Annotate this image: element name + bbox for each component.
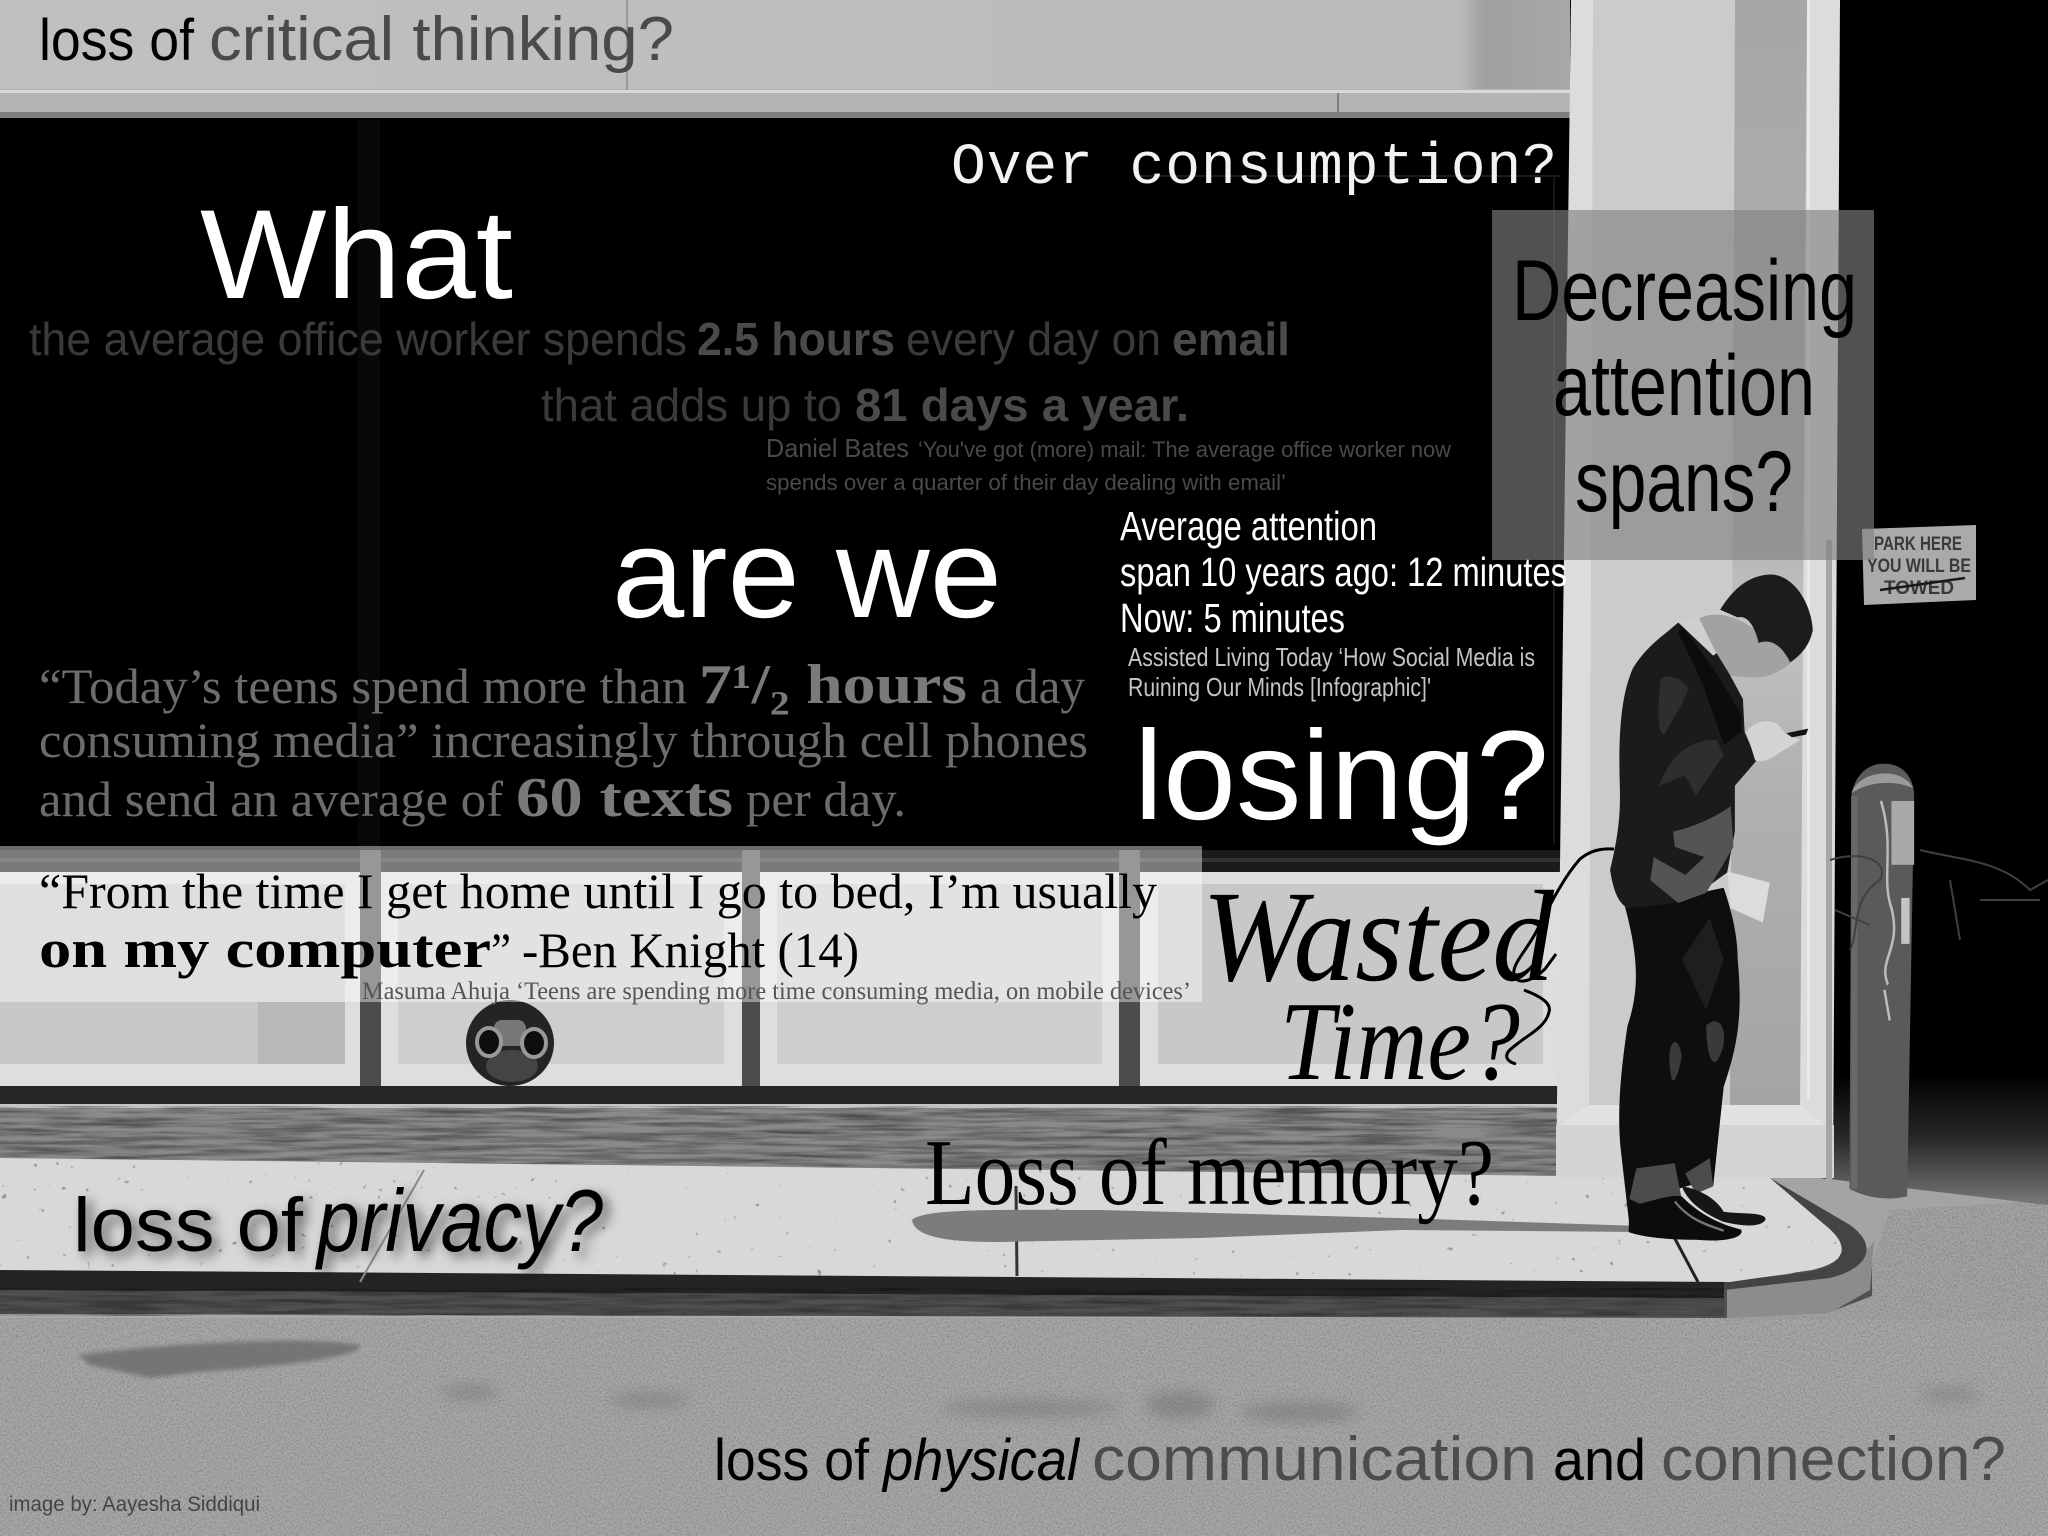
teen media statistic: and send an average of bbox=[39, 771, 503, 827]
road shadow blotches bbox=[78, 1341, 1980, 1422]
translucent quote panel: -Ben Knight (14) bbox=[522, 922, 859, 978]
heading: loss of physical communication and connection: connection? bbox=[1661, 1425, 2006, 1494]
title word: What: What bbox=[200, 183, 513, 325]
jacket bbox=[1610, 622, 1757, 908]
translucent quote panel: “From the time I get home until I go to bed, I’m usually bbox=[39, 863, 1157, 919]
teen media statistic bbox=[39, 654, 1088, 829]
email source: Daniel Bates bbox=[766, 433, 909, 463]
hair bbox=[1720, 574, 1813, 662]
translucent quote panel: ” bbox=[491, 922, 511, 978]
bollard post bbox=[1850, 764, 1914, 1198]
teen media statistic: 7¹/₂ hours bbox=[699, 654, 967, 716]
paper in hand bbox=[1727, 871, 1770, 922]
right dark ground bbox=[1830, 1075, 2048, 1220]
heading: loss of memory: Loss of memory? bbox=[925, 1121, 1494, 1225]
decreasing attention spans panel bbox=[1492, 210, 1874, 560]
heading: loss of physical communication and connection: loss of bbox=[714, 1428, 870, 1493]
attention span statistic: Average attention bbox=[1120, 503, 1377, 549]
email statistic bbox=[29, 313, 1290, 431]
attention span statistic: span 10 years ago: 12 minutes bbox=[1120, 549, 1567, 595]
man looking at phone bbox=[1610, 574, 1813, 1240]
upper wall bbox=[0, 0, 1570, 90]
heading: loss of privacy: loss of bbox=[73, 1183, 304, 1268]
ledge bbox=[0, 0, 1570, 118]
email source: spends over a quarter of their day dealing with email’ bbox=[766, 470, 1286, 495]
sign: park here: PARK HERE bbox=[1874, 534, 1962, 555]
email source bbox=[766, 433, 1451, 495]
sign: park here: YOU WILL BE bbox=[1867, 556, 1971, 577]
hydrant connection bbox=[466, 1000, 554, 1086]
email statistic: email bbox=[1172, 313, 1290, 365]
heading: loss of privacy: privacy? bbox=[314, 1171, 603, 1270]
heading: wasted time bbox=[1202, 849, 1614, 1104]
heading: loss of physical communication and connection: physical bbox=[881, 1428, 1081, 1493]
teen media statistic: per day. bbox=[746, 771, 906, 827]
heading: loss of physical communication and connection: and bbox=[1553, 1428, 1646, 1493]
translucent quote panel bbox=[0, 846, 1202, 1005]
email statistic: 81 days a year. bbox=[855, 379, 1189, 431]
attention span source: Ruining Our Minds [Infographic]' bbox=[1128, 672, 1431, 702]
decreasing attention spans panel: attention bbox=[1553, 338, 1815, 434]
trousers bbox=[1619, 888, 1740, 1224]
email statistic: the average office worker spends bbox=[29, 313, 687, 365]
collar bbox=[1678, 615, 1717, 656]
heading: wasted time: Wasted bbox=[1202, 865, 1555, 1009]
attention span source: Assisted Living Today ‘How Social Media is bbox=[1128, 642, 1535, 672]
hand and phone bbox=[1746, 721, 1801, 761]
email statistic: 2.5 hours bbox=[697, 313, 895, 365]
sign: park here bbox=[1862, 525, 1976, 605]
decreasing attention spans panel: Decreasing bbox=[1512, 243, 1857, 339]
heading: loss of physical communication and connection bbox=[714, 1425, 2006, 1494]
teen media statistic: 60 texts bbox=[516, 767, 733, 829]
head and face bbox=[1699, 615, 1801, 678]
curb bbox=[0, 1178, 1874, 1318]
heading: loss of physical communication and connection: communication bbox=[1092, 1425, 1537, 1494]
teen media statistic: consuming media” increasingly through cell phones bbox=[39, 712, 1088, 768]
translucent quote panel: Masuma Ahuja ‘Teens are spending more time consuming media, on mobile devices’ bbox=[362, 978, 1191, 1005]
email source: ‘You've got (more) mail: The average office worker now bbox=[918, 437, 1451, 462]
email statistic: that adds up to bbox=[541, 379, 842, 431]
email statistic: every day on bbox=[906, 313, 1161, 365]
teen media statistic: a day bbox=[980, 658, 1085, 714]
heading: loss of critical thinking: critical thinking? bbox=[209, 5, 674, 74]
heading: over consumption: Over consumption? bbox=[951, 136, 1557, 201]
sidewalk bbox=[0, 1158, 1842, 1282]
road bbox=[0, 1172, 2048, 1536]
sign: park here: TOWED bbox=[1884, 578, 1954, 599]
sill bbox=[0, 1086, 1565, 1186]
heading: wasted time: Time? bbox=[1280, 980, 1520, 1104]
pillar bbox=[1556, 0, 1840, 1180]
heading: loss of privacy bbox=[73, 1171, 603, 1270]
attention span source bbox=[1128, 642, 1535, 702]
attention span statistic: Now: 5 minutes bbox=[1120, 595, 1345, 641]
man's shadow on sidewalk bbox=[912, 1210, 1640, 1242]
attention span statistic bbox=[1120, 503, 1567, 641]
heading: loss of critical thinking bbox=[39, 5, 674, 74]
title word: losing: losing? bbox=[1134, 704, 1549, 846]
shoes bbox=[1629, 1196, 1742, 1240]
translucent quote panel: on my computer bbox=[39, 919, 491, 979]
title words: are we: are we bbox=[612, 502, 1002, 644]
teen media statistic: “Today’s teens spend more than bbox=[39, 658, 687, 714]
road texture bbox=[0, 1170, 2048, 1536]
graffiti on dark wall bbox=[1830, 850, 2048, 950]
heading: loss of critical thinking: loss of bbox=[39, 8, 195, 73]
decreasing attention spans panel: spans? bbox=[1575, 434, 1793, 530]
lower window panels bbox=[0, 850, 1560, 1088]
vest and lit jacket folds bbox=[1650, 806, 1733, 903]
dark window bbox=[0, 118, 1568, 872]
image credit: image by: Aayesha Siddiqui bbox=[9, 1493, 260, 1516]
